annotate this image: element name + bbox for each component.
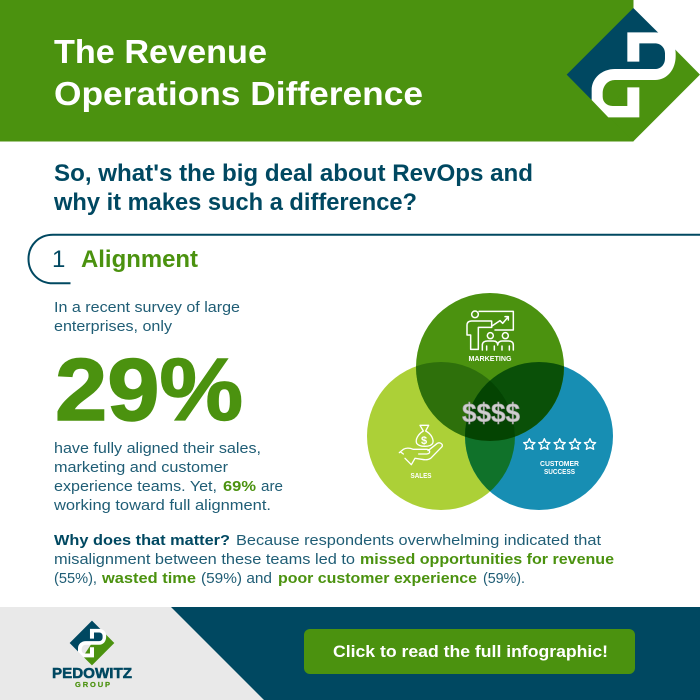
why it matters paragraph: (55%),: [54, 570, 97, 587]
header banner: [0, 0, 700, 142]
logo wordmark: GROUP: [75, 680, 110, 689]
label: customer success: CUSTOMER: [540, 459, 580, 468]
circle: marketing: [416, 293, 564, 441]
logo wordmark: PEDOWITZ: [52, 665, 132, 682]
section heading: 1 Alignment: [28, 235, 700, 283]
statistic description: have fully aligned their sales,: [54, 440, 261, 457]
footer: [0, 607, 700, 700]
subtitle question: [53, 160, 533, 216]
why it matters paragraph: Because respondents overwhelming indicated that: [236, 532, 602, 549]
label: marketing: MARKETING: [468, 354, 512, 363]
icon: five stars: [524, 439, 596, 449]
venn diagram: [367, 293, 613, 510]
why it matters paragraph: missed opportunities for revenue: [360, 551, 614, 568]
why it matters paragraph: poor customer experience: [278, 570, 477, 587]
overlap: centre: [465, 380, 515, 441]
icon: Pedowitz logo large: [567, 8, 700, 141]
statistic description: 69%: [223, 478, 256, 495]
why it matters paragraph: [54, 532, 614, 587]
label: customer success: [540, 459, 580, 476]
intro text: In a recent survey of large: [54, 299, 240, 316]
statistic description: experience teams. Yet,: [54, 478, 217, 495]
title: The Revenue: [54, 33, 267, 70]
statistic description: are: [261, 478, 283, 495]
dollar signs: $$$$: [462, 398, 520, 428]
overlap: sales and customer: [465, 436, 515, 492]
why it matters paragraph: (59%).: [483, 570, 525, 587]
section heading: 1 Alignment: Alignment: [81, 246, 198, 273]
big statistic 29%: 29%: [55, 340, 243, 439]
statistic description: marketing and customer: [54, 459, 228, 476]
button: [304, 629, 635, 674]
icon: Pedowitz logo small: [70, 621, 114, 665]
intro text: enterprises, only: [54, 318, 173, 335]
why it matters paragraph: misalignment between these teams led to: [54, 551, 355, 568]
why it matters paragraph: Why does that matter?: [54, 532, 230, 549]
icon: presenter: [467, 311, 513, 350]
label: sales: SALES: [410, 471, 432, 480]
button: Click to read the full infographic!: [333, 642, 608, 661]
subtitle question: So, what's the big deal about RevOps and: [54, 160, 533, 187]
title: Operations Difference: [54, 75, 423, 112]
icon: hand with money bag: [399, 425, 442, 465]
overlap: marketing and sales: [416, 362, 490, 436]
subtitle question: why it makes such a difference?: [53, 189, 417, 216]
section heading: 1 Alignment: 1: [52, 246, 65, 273]
why it matters paragraph: (59%) and: [201, 570, 272, 587]
why it matters paragraph: wasted time: [101, 570, 196, 587]
intro text: [54, 299, 240, 335]
label: customer success: SUCCESS: [544, 467, 575, 476]
circle: customer success: [465, 362, 613, 510]
overlap: marketing and customer: [490, 362, 564, 437]
dollar in bag: $: [421, 435, 427, 447]
statistic description: working toward full alignment.: [53, 497, 271, 514]
title: [54, 33, 423, 112]
statistic description: [53, 440, 283, 514]
circle: sales: [367, 362, 515, 510]
